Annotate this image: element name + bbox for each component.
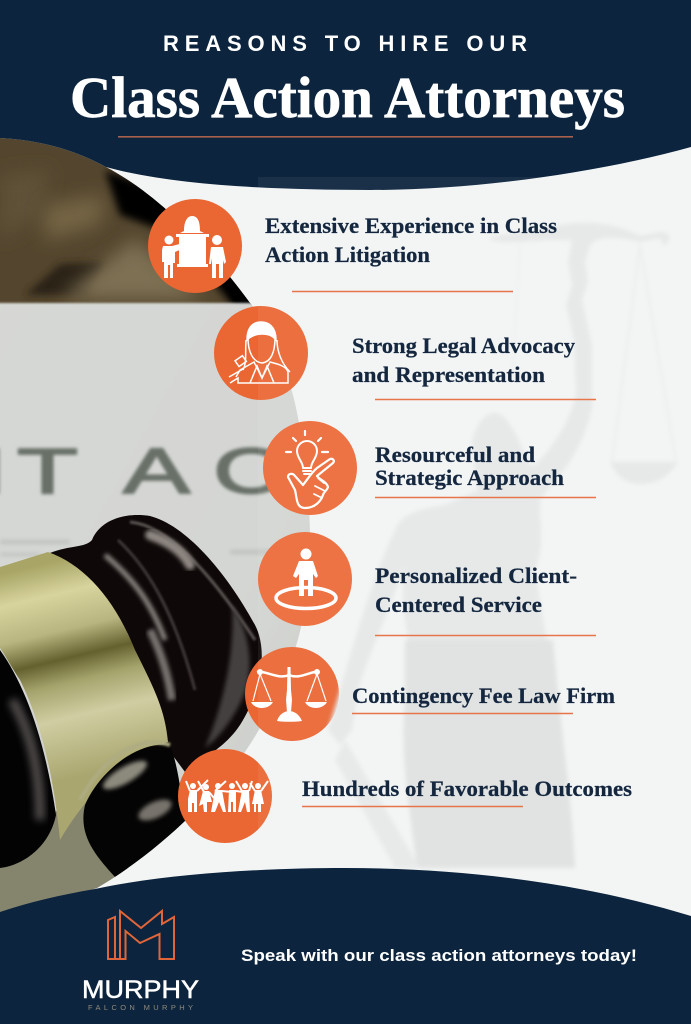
text: favorable outcomes: Hundreds of Favorable Outcomes: [302, 776, 632, 801]
heading: reasons to hire our: REASONS TO HIRE OUR: [163, 31, 527, 56]
reason 1: extensive experience: Action Litigation: [265, 242, 430, 267]
statue: lady justice watermark: [328, 223, 678, 868]
header navy band: [0, 0, 691, 190]
photo: blurred document text: A: [123, 435, 190, 507]
reason 3: resourceful and strategic: Strategic Approach: [375, 465, 564, 490]
logo: murphy falcon murphy: [82, 911, 199, 1012]
icon: cheering group: [186, 780, 268, 812]
reason 2: strong legal advocacy: and Representation: [352, 362, 545, 387]
footer navy band: [0, 868, 691, 1024]
text: resourceful and strategic: Resourceful and: [375, 442, 535, 467]
call to action: Speak with our class action attorneys today!: [241, 946, 637, 965]
photo: table below document: [0, 802, 127, 912]
icon: courtroom with judge: [162, 216, 226, 278]
icon: scales of justice: [251, 667, 327, 722]
gavel: left cap: [0, 650, 56, 868]
reason 1: extensive experience: [162, 213, 557, 292]
logo mark: [108, 911, 174, 959]
heading underline: [118, 136, 573, 138]
photo: gavel on class action document: [0, 138, 310, 912]
icon: female lawyer with gavel: [229, 322, 290, 383]
translucent statue panel: [258, 177, 652, 877]
photo: blurred document text: C: [213, 435, 285, 507]
gavel: [0, 515, 262, 877]
text: extensive experience: Extensive Experience in Class: [265, 213, 557, 238]
photo: faint small print: [0, 540, 290, 556]
heading: class action attorneys: Class Action Attorneys: [70, 65, 625, 130]
icon circle backgrounds: [148, 199, 357, 843]
reason 2: strong legal advocacy: [229, 322, 596, 400]
icon: person in circle: [276, 548, 336, 608]
reason 3: resourceful and strategic: [286, 431, 596, 508]
reason 4: personalized client-centered: [276, 548, 596, 636]
photo: blurred wooden table: [0, 138, 253, 307]
gavel: brass band: [0, 552, 168, 840]
photo: blurred document text: T: [17, 435, 78, 507]
logo tagline: FALCON MURPHY: [88, 1003, 193, 1012]
text: strong legal advocacy: Strong Legal Advocacy: [352, 333, 575, 358]
gavel: head rings: [50, 515, 262, 772]
text: contingency fee: Contingency Fee Law Firm: [352, 683, 615, 708]
reason 4: personalized client-centered: Centered Service: [375, 592, 542, 617]
gavel: handle: [83, 744, 187, 877]
photo: blurred document text: [0, 445, 270, 496]
text: personalized client-centered: Personalized Client-: [375, 563, 577, 588]
icon: light bulb and pointing hand: [286, 431, 334, 508]
photo: white document: [0, 301, 310, 889]
logo wordmark: MURPHY: [82, 976, 199, 1004]
reason 6: favorable outcomes: [186, 776, 632, 812]
reason 5: contingency fee: [251, 667, 615, 722]
